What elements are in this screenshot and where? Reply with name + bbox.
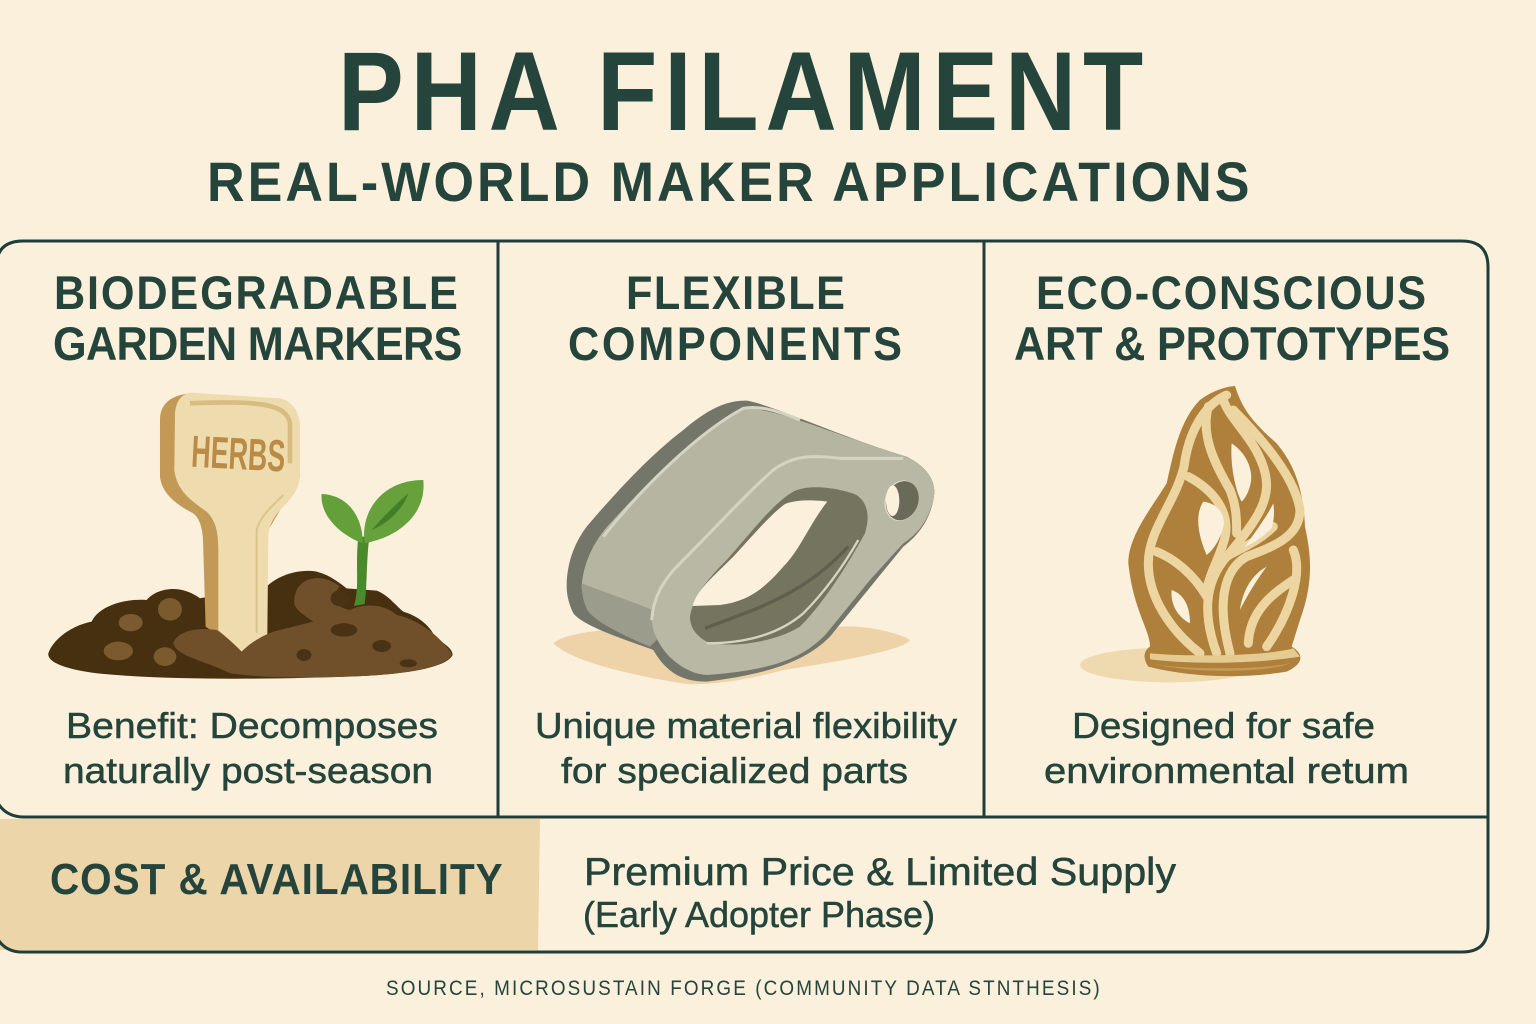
body: eco-conscious benefit [1044, 705, 1409, 791]
cost and availability detail: (Early Adopter Phase) [583, 894, 935, 935]
source footnote: SOURCE, MICROSUSTAIN FORGE (COMMUNITY DATA STNTHESIS) [386, 977, 1100, 1000]
body: eco-conscious benefit: Designed for safe [1072, 705, 1375, 746]
cost and availability heading: COST & AVAILABILITY [50, 854, 503, 903]
body: eco-conscious benefit: environmental retum [1044, 750, 1409, 791]
soil foreground [173, 578, 452, 677]
heading: garden markers: GARDEN MARKERS [53, 317, 462, 370]
cost band tan label background [0, 819, 540, 950]
cost and availability detail: Premium Price & Limited Supply [584, 851, 1177, 894]
subtitle: REAL-WORLD MAKER APPLICATIONS [207, 151, 1250, 213]
icon: herb marker in soil with seedling [48, 393, 453, 679]
title: PHA FILAMENT [338, 30, 1143, 154]
panel: biodegradable garden markers [48, 266, 462, 791]
body: flexible components benefit [535, 705, 957, 791]
icon: flexible grey bracket part [553, 401, 934, 684]
heading: eco-conscious art: ART & PROTOTYPES [1014, 317, 1450, 370]
cost and availability detail [583, 851, 1177, 935]
heading: eco-conscious art [1014, 266, 1450, 370]
heading: garden markers: BIODEGRADABLE [54, 266, 458, 319]
heading: flexible components: FLEXIBLE [626, 266, 845, 319]
heading: flexible components [568, 266, 902, 370]
heading: garden markers [53, 266, 462, 370]
body: flexible components benefit: for specialized parts [561, 750, 908, 791]
body: garden markers benefit [63, 705, 438, 791]
body: flexible components benefit: Unique material flexibility [535, 705, 957, 746]
marker label: HERBS: HERBS [190, 426, 287, 482]
heading: flexible components: COMPONENTS [568, 317, 902, 370]
panel: eco-conscious art and prototypes [1014, 266, 1450, 791]
small mounting hole [879, 476, 924, 526]
body: garden markers benefit: Benefit: Decomposes [66, 705, 438, 746]
icon: lattice flame sculpture [1080, 386, 1310, 682]
panel: flexible components [535, 266, 957, 791]
heading: eco-conscious art: ECO-CONSCIOUS [1036, 266, 1426, 319]
panel frame: three application columns and cost row [0, 241, 1488, 952]
seedling [322, 480, 424, 606]
body: garden markers benefit: naturally post-season [63, 750, 433, 791]
